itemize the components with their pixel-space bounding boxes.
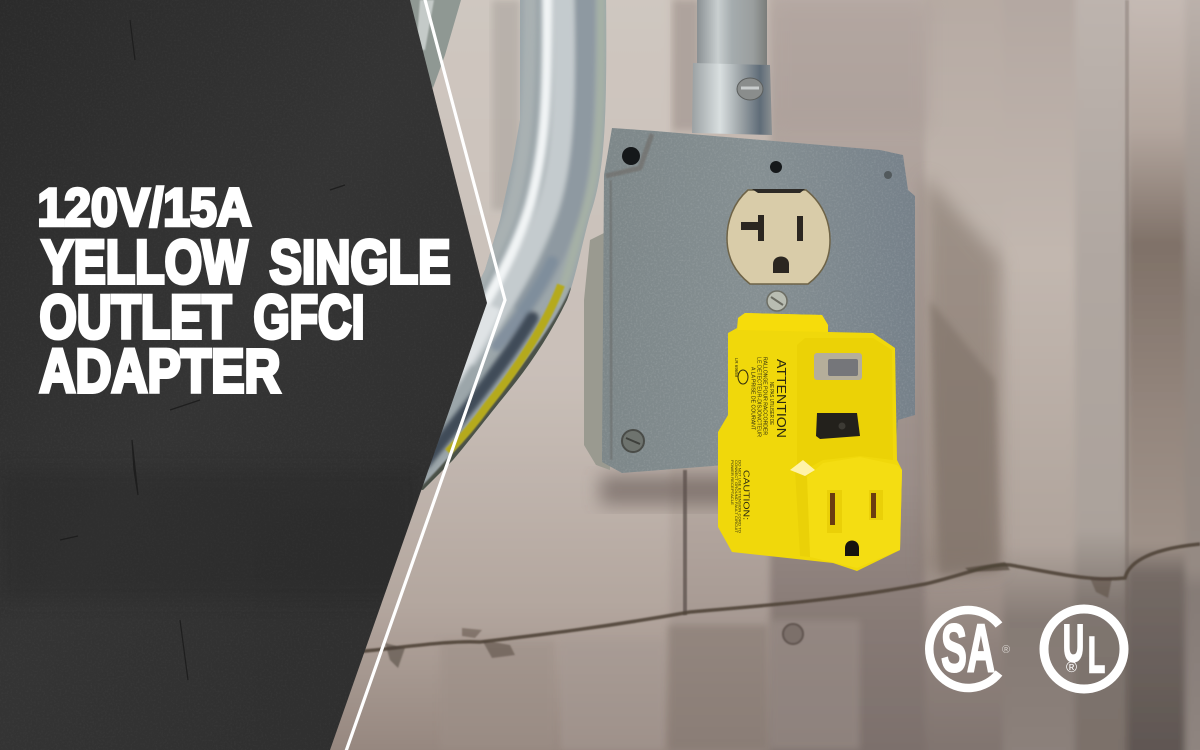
photo background: corrugated wall xyxy=(280,0,1200,750)
printed warning text: LR 69659 xyxy=(734,358,739,377)
wall seam crack xyxy=(355,544,1200,668)
printed warning text: A LA PRISE DE COURANT xyxy=(750,367,756,431)
printed warning text: ATTENTION xyxy=(774,359,789,438)
CSA certification badge xyxy=(929,610,1010,688)
coupling screw xyxy=(737,78,763,100)
title line 2: YELLOW xyxy=(42,228,248,297)
title xyxy=(38,178,450,406)
large bent conduit xyxy=(421,0,606,490)
metal junction box xyxy=(600,125,920,475)
UL certification badge xyxy=(1044,609,1124,689)
wall screw xyxy=(783,624,803,644)
title line 3: OUTLET xyxy=(40,283,232,352)
title line 2: SINGLE xyxy=(270,228,450,297)
printed warning text xyxy=(730,357,789,534)
dark title panel xyxy=(60,0,487,750)
UL certification badge: L xyxy=(1088,627,1105,683)
left flange of electrical box xyxy=(584,232,610,470)
printed warning text: CONNECT GROUND FAULT CIRCUIT xyxy=(734,460,739,534)
printed warning text: CAUTION: xyxy=(742,470,750,520)
UL certification badge: U xyxy=(1063,615,1084,673)
test button xyxy=(816,413,860,439)
button recess xyxy=(797,338,893,470)
printed warning text: RALLONGE POUR RACCORDER xyxy=(762,357,768,435)
UL certification badge: ® xyxy=(1066,659,1077,676)
title line 4: ADAPTER xyxy=(40,337,280,406)
outlet slots xyxy=(827,490,883,556)
yellow GFCI adapter xyxy=(718,313,902,571)
highlight xyxy=(790,460,815,476)
white chevron line xyxy=(345,0,505,750)
corner screw xyxy=(622,430,644,452)
small conduit, top left xyxy=(405,0,461,88)
title line 3: GFCI xyxy=(254,283,364,352)
adapter body xyxy=(718,313,902,571)
printed warning text: LE DETECTEUR-DISJONCTEUR xyxy=(756,357,762,437)
printed warning text: NE PAS UTILISER DE xyxy=(768,382,774,425)
vertical conduit and coupling xyxy=(673,0,772,135)
CSA certification badge: SA xyxy=(941,610,995,686)
printed warning text: DO NOT USE EXTENSION CORD TO xyxy=(738,460,742,533)
title line 2 xyxy=(42,228,450,297)
printed warning text: POWER RECEPTACLE xyxy=(730,460,735,505)
title line 1: 120V/15A xyxy=(38,178,252,238)
beige wall receptacle xyxy=(727,189,830,284)
outlet face xyxy=(807,457,902,568)
panel texture xyxy=(60,20,416,680)
CSA certification badge: ® xyxy=(1002,644,1010,656)
receptacle screw xyxy=(767,291,787,311)
top tab xyxy=(738,313,828,332)
reset button xyxy=(814,353,862,380)
box screw holes xyxy=(622,147,892,179)
